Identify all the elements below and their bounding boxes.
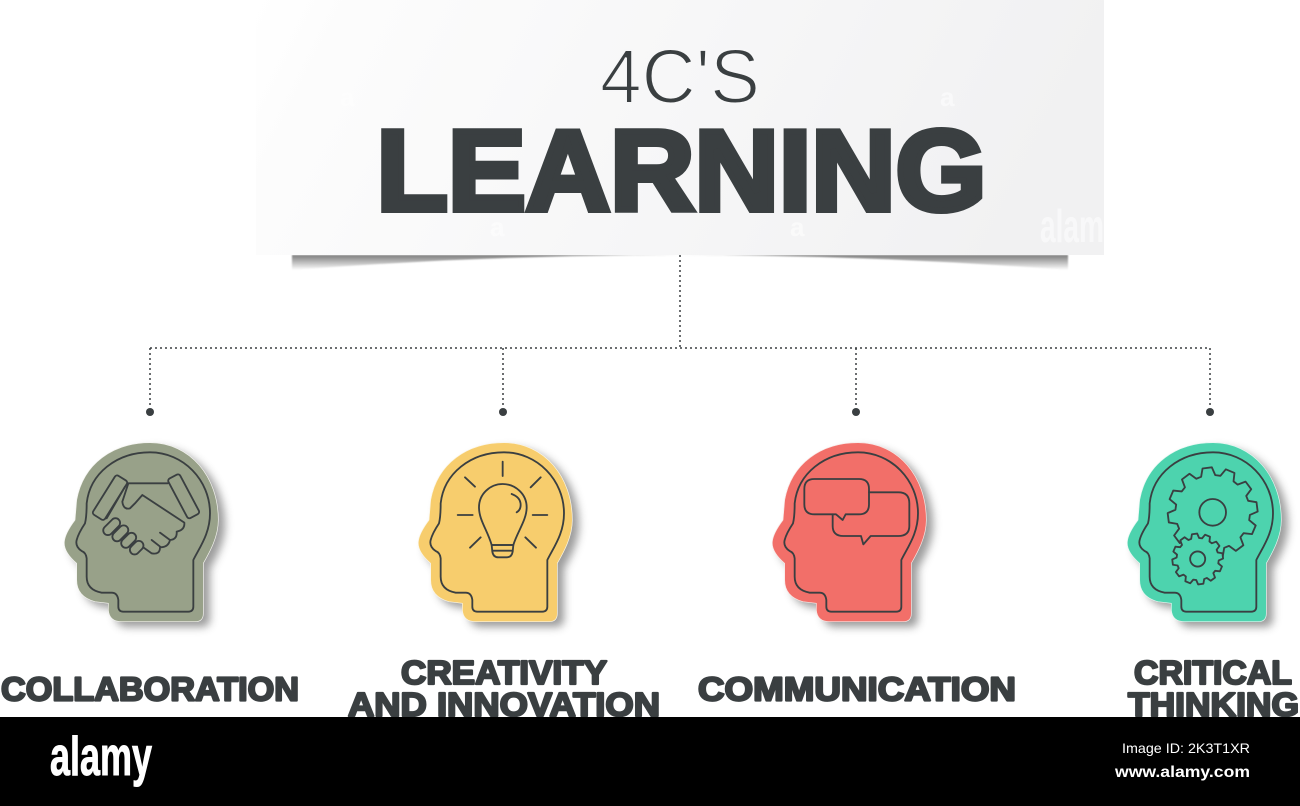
icon: head with speech bubbles (communication) [772, 443, 933, 627]
panel watermarks [340, 82, 1104, 252]
footer logo: alamy: alamy [50, 725, 152, 787]
label: critical thinking [1128, 654, 1299, 723]
panel watermarks: alam [1040, 200, 1104, 252]
panel watermarks: a [790, 212, 805, 242]
title: LEARNING: LEARNING [376, 108, 986, 235]
label: creativity and innovation: AND INNOVATION [348, 686, 660, 723]
label: creativity and innovation: CREATIVITY [401, 654, 607, 691]
panel watermarks: a [340, 82, 355, 112]
dotted connector tree [146, 255, 1214, 416]
icon: head with handshake (collaboration) [64, 443, 225, 627]
label: communication: COMMUNICATION [698, 670, 1016, 708]
footer image id: Image ID: 2K3T1XR [1122, 740, 1250, 756]
label: critical thinking: CRITICAL [1134, 654, 1292, 691]
panel watermarks: a [940, 82, 955, 112]
title: 4C'S: 4C'S [600, 34, 760, 120]
title panel shadow [292, 255, 1068, 270]
icon: head with light bulb (creativity) [418, 443, 579, 627]
label: creativity and innovation [348, 654, 660, 723]
panel watermarks: a [490, 212, 505, 242]
icon: head with gears (critical thinking) [1127, 443, 1288, 627]
label: critical thinking: THINKING [1128, 686, 1299, 723]
footer band [0, 717, 1300, 806]
footer url: www.alamy.com [1114, 764, 1250, 781]
title panel [256, 0, 1104, 255]
label: collaboration: COLLABORATION [1, 670, 299, 708]
